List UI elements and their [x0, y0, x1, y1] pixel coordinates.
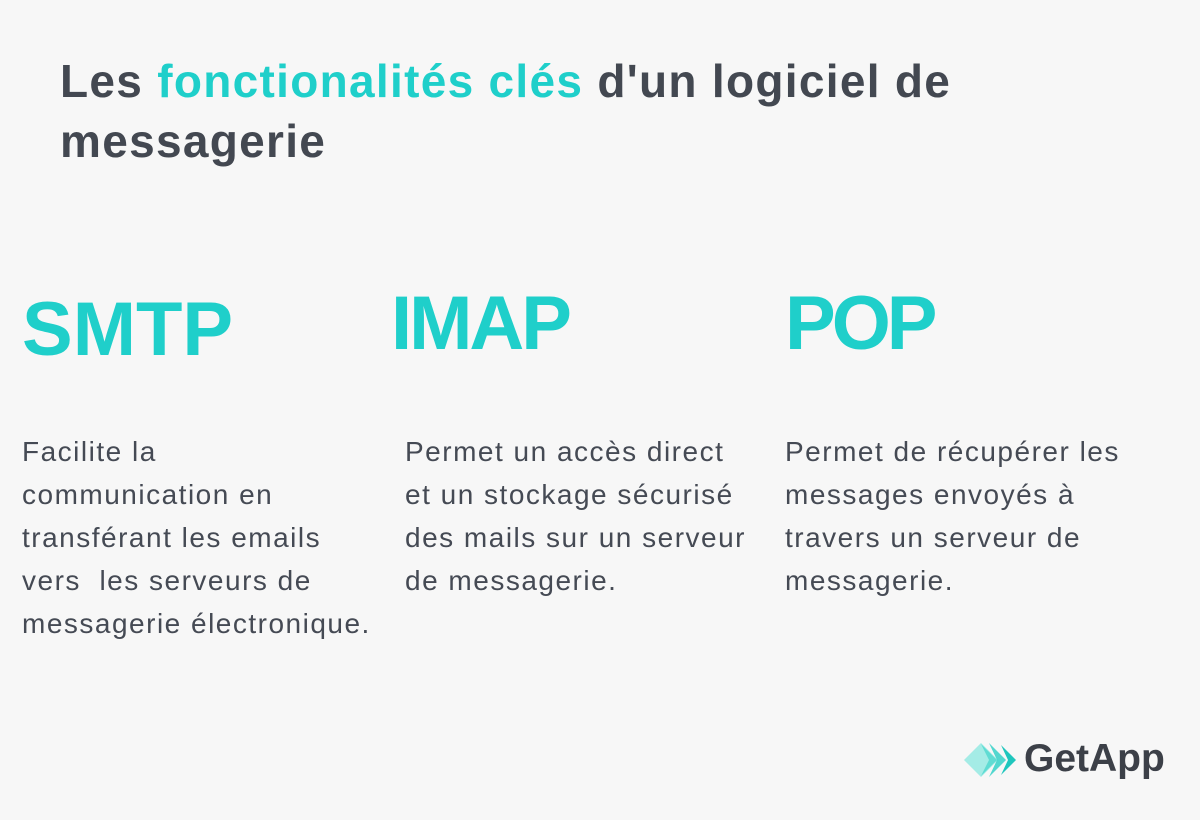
text: POP description: messages envoyés à — [785, 479, 1075, 510]
heading: POP: POP — [785, 281, 934, 366]
text: POP description — [785, 436, 1120, 596]
title: Les fonctionalités clés d'un logiciel de messagerie — [60, 55, 951, 167]
text: SMTP description: Facilite la — [22, 436, 157, 467]
text: IMAP description: de messagerie. — [405, 565, 617, 596]
text: IMAP description: Permet un accès direct — [405, 436, 724, 467]
text: IMAP description: et un stockage sécurisé — [405, 479, 734, 510]
text: GetApp: GetApp — [1024, 737, 1165, 780]
panel: IMAP — [391, 281, 746, 596]
text: SMTP description: vers les serveurs de — [22, 565, 312, 596]
icon: GetApp chevrons — [964, 743, 1016, 777]
text: SMTP description: messagerie électronique. — [22, 608, 371, 639]
text: IMAP description: des mails sur un serveur — [405, 522, 746, 553]
heading: SMTP: SMTP — [22, 287, 233, 372]
text: SMTP description — [22, 436, 371, 639]
text: SMTP description: communication en — [22, 479, 273, 510]
text: SMTP description: transférant les emails — [22, 522, 321, 553]
text: POP description: messagerie. — [785, 565, 954, 596]
panel: POP — [785, 281, 1120, 596]
text: IMAP description — [405, 436, 746, 596]
text: POP description: travers un serveur de — [785, 522, 1081, 553]
logo: GetApp — [964, 737, 1165, 780]
heading: IMAP: IMAP — [391, 281, 569, 366]
text: POP description: Permet de récupérer les — [785, 436, 1120, 467]
panel: SMTP — [22, 287, 371, 639]
